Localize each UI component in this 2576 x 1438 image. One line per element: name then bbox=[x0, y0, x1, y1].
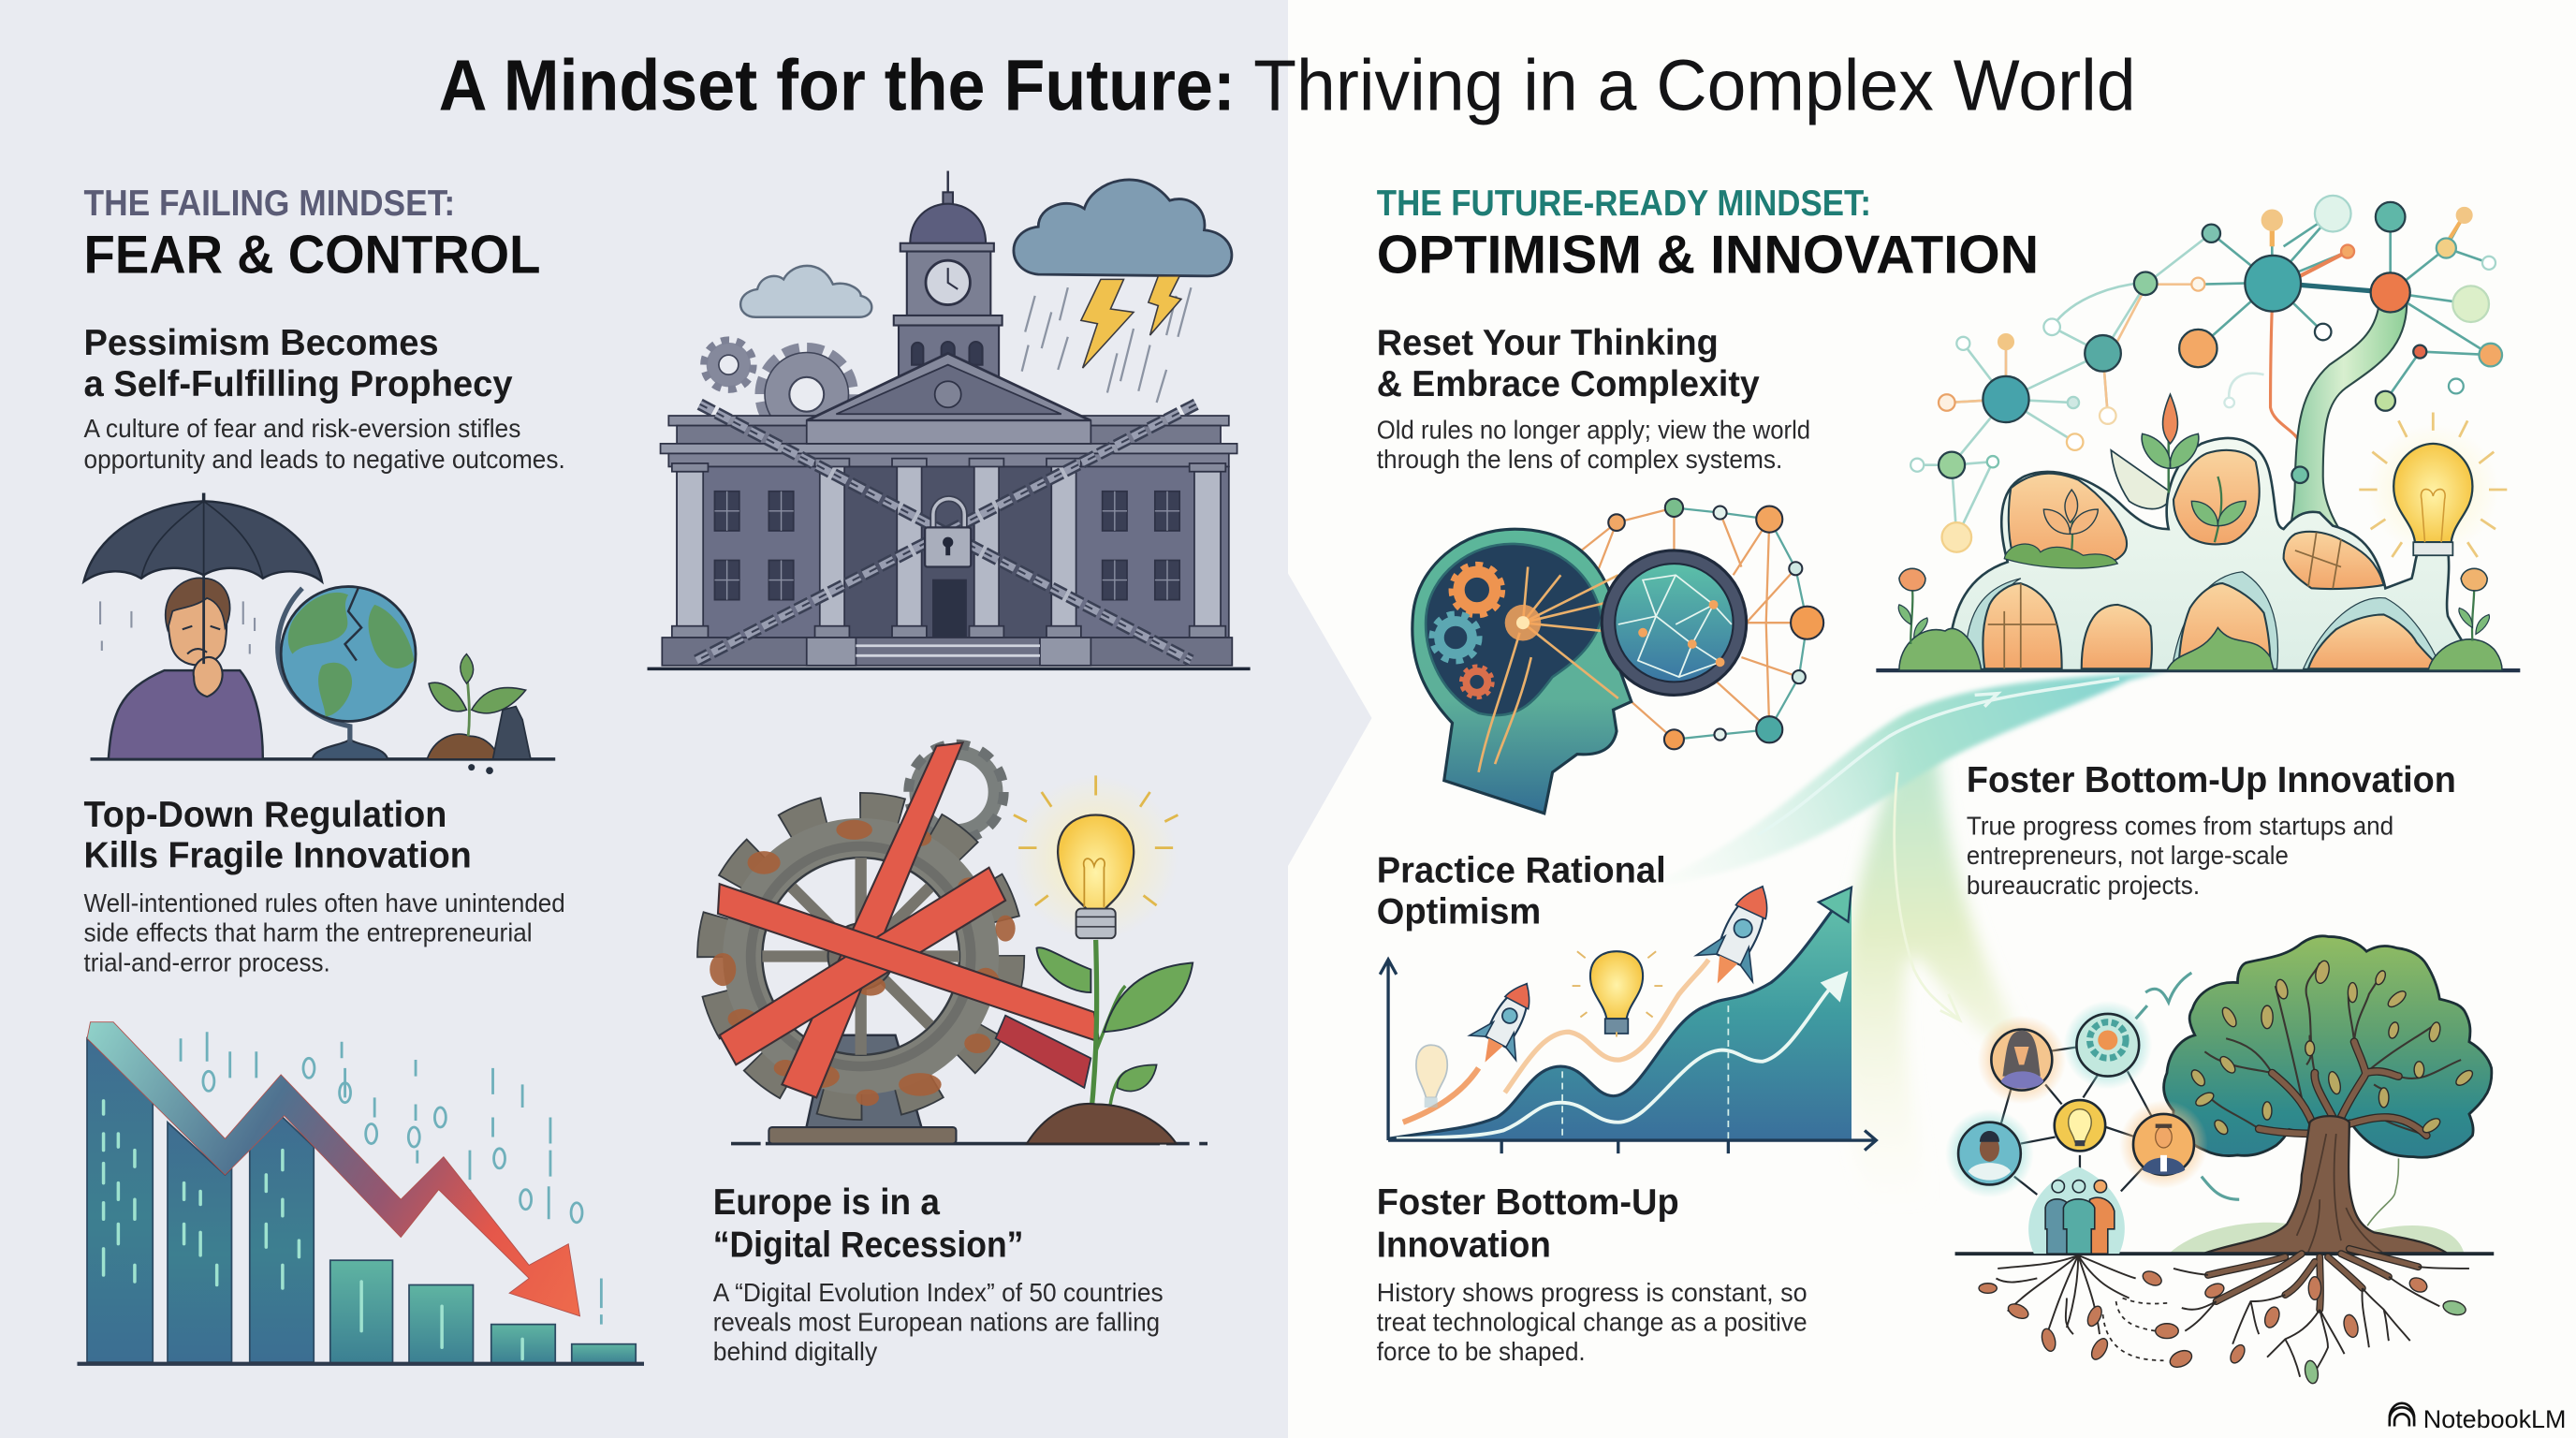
text block: digital recession: A “Digital Evolution Index” of 50 countries bbox=[713, 1278, 1164, 1307]
rocket large bbox=[1689, 873, 1791, 997]
flow arrow: river to rational optimism and to tree bbox=[1643, 670, 2169, 1199]
downward zigzag arrow bbox=[87, 1022, 580, 1316]
globe bbox=[278, 587, 416, 759]
dashed connection paths bbox=[2103, 1299, 2169, 1360]
door bbox=[933, 580, 966, 638]
green growth stem bbox=[2280, 305, 2407, 567]
text block: top-down regulation: side effects that harm the entrepreneurial bbox=[84, 918, 533, 947]
pale orange trail bbox=[1505, 960, 1708, 1093]
top curve bbox=[1388, 901, 1840, 1138]
sprout stem and leaves bbox=[1027, 940, 1193, 1144]
future lightbulb bbox=[2359, 413, 2507, 557]
panel: failing mindset bbox=[77, 171, 1251, 1366]
sprouts and greenery bbox=[1898, 394, 2502, 670]
ground line bbox=[1876, 669, 2520, 671]
gear stand bbox=[805, 1035, 923, 1134]
chart: falling digital bars bbox=[77, 1022, 644, 1364]
text block: pessimism: A culture of fear and risk-eversion stifles bbox=[84, 414, 520, 443]
large rusty gear bbox=[710, 809, 1016, 1106]
ascending orange trail bbox=[1403, 1068, 1479, 1123]
clock tower bbox=[894, 171, 1003, 391]
area bbox=[1388, 888, 1852, 1140]
pediment bbox=[807, 353, 1090, 420]
illustration: tree and people network bbox=[1945, 936, 2494, 1385]
dark red back plank bbox=[996, 1016, 1090, 1088]
base and steps bbox=[662, 638, 1232, 666]
title: A Mindset for the Future: bbox=[439, 46, 1236, 126]
text block: reset your thinking bbox=[1377, 323, 1810, 474]
illustration: blocked rusty gear and lightbulb sprout bbox=[710, 742, 1208, 1144]
binary inside bars bbox=[104, 1101, 522, 1358]
text block: top-down regulation: trial-and-error process. bbox=[84, 947, 330, 976]
title: Thriving in a Complex World bbox=[1253, 46, 2136, 126]
text block: digital recession: Europe is in a bbox=[713, 1182, 940, 1223]
person bbox=[109, 578, 263, 759]
faded lightbulb bbox=[1416, 1045, 1447, 1108]
text block: foster bottom-up innovation (lower): History shows progress is constant, so bbox=[1377, 1278, 1808, 1307]
bars bbox=[87, 1038, 636, 1364]
padlock bbox=[925, 499, 971, 567]
lightning bolts bbox=[1081, 276, 1181, 368]
thin underground roots bbox=[1996, 1255, 2469, 1377]
illustration: organic building with network tree bbox=[1876, 196, 2520, 670]
thin branches bbox=[2204, 963, 2461, 1136]
lightbulb node bbox=[2055, 1100, 2105, 1151]
text block: reset your thinking: Reset Your Thinking bbox=[1377, 323, 1719, 363]
axes bbox=[1380, 960, 1876, 1153]
text block: top-down regulation: Well-intentioned rules often have unintended bbox=[84, 888, 565, 917]
text block: foster bottom-up innovation (lower): force to be shaped. bbox=[1377, 1337, 1586, 1366]
heading: practice rational optimism: Optimism bbox=[1377, 891, 1541, 932]
illustration: head with lens and network bbox=[1412, 499, 1823, 814]
windows bbox=[714, 492, 1179, 600]
section heading: optimism and innovation: OPTIMISM & INNOVATION bbox=[1377, 225, 2039, 285]
text block: pessimism: Pessimism Becomes bbox=[84, 323, 439, 363]
glowing lightbulb bbox=[1014, 775, 1178, 940]
text block: pessimism: opportunity and leads to negative outcomes. bbox=[84, 445, 565, 474]
node on stem bbox=[2291, 466, 2308, 483]
dashed guides bbox=[1562, 1005, 1728, 1138]
text block: top-down regulation: Kills Fragile Innovation bbox=[84, 836, 472, 876]
main building bbox=[661, 353, 1237, 666]
panel: future-ready mindset bbox=[1377, 183, 2520, 1385]
section heading: fear and control: FEAR & CONTROL bbox=[84, 225, 540, 285]
small cloud bbox=[740, 266, 871, 317]
text block: digital recession: behind digitally bbox=[713, 1337, 877, 1366]
text block: foster bottom-up innovation (upper): True progress comes from startups and bbox=[1967, 812, 2393, 841]
network nodes bbox=[1910, 196, 2502, 552]
falling binary digits bbox=[181, 1032, 601, 1325]
green root leaves bbox=[2304, 1299, 2467, 1385]
heading: practice rational optimism bbox=[1377, 851, 1666, 932]
seedling and rock bbox=[427, 654, 531, 774]
storm cloud bbox=[1014, 180, 1232, 276]
trunk and surface roots bbox=[2203, 1116, 2448, 1254]
people network links bbox=[2001, 1047, 2152, 1195]
heading: practice rational optimism: Practice Rational bbox=[1377, 851, 1666, 891]
lightbulb bbox=[1573, 951, 1662, 1036]
trunk grain bbox=[2297, 1134, 2382, 1252]
inner white curve bbox=[1397, 981, 1837, 1138]
text block: top-down regulation: Top-Down Regulation bbox=[84, 795, 446, 835]
brain gears bbox=[1432, 565, 1618, 772]
text block: pessimism bbox=[84, 323, 565, 474]
thick underground roots bbox=[2208, 1249, 2419, 1310]
logo: NotebookLM bbox=[2390, 1403, 2566, 1433]
network nodes bbox=[1608, 499, 1823, 749]
text block: foster bottom-up innovation (upper) bbox=[1967, 760, 2456, 900]
building windows bbox=[1983, 450, 2441, 668]
gears behind building bbox=[704, 340, 853, 440]
text block: reset your thinking: through the lens of complex systems. bbox=[1377, 445, 1782, 474]
text block: digital recession: “Digital Recession” bbox=[713, 1225, 1023, 1266]
rain bbox=[1022, 287, 1191, 403]
icon: notebook arcs bbox=[2390, 1403, 2414, 1426]
columns bbox=[677, 465, 1221, 631]
text block: foster bottom-up innovation (upper): entrepreneurs, not large-scale bbox=[1967, 841, 2289, 870]
text block: reset your thinking: & Embrace Complexity bbox=[1377, 364, 1760, 404]
wordmark: NotebookLM bbox=[2423, 1404, 2566, 1433]
rain streaks bbox=[100, 601, 255, 654]
network links bbox=[1917, 213, 2491, 537]
illustration: person under umbrella with cracked globe bbox=[84, 493, 555, 774]
person node: man right bbox=[2119, 1100, 2208, 1189]
flying birds and drifting leaves bbox=[2136, 973, 2239, 1199]
magnifying lens bbox=[1602, 550, 1747, 695]
rocket small bbox=[1462, 972, 1550, 1075]
people group with halo bbox=[2028, 1167, 2125, 1254]
text block: foster bottom-up innovation (upper): bureaucratic projects. bbox=[1967, 871, 2200, 900]
small rusty gear bbox=[916, 753, 996, 831]
soft hill bbox=[2169, 1223, 2465, 1254]
white arrowhead bbox=[1821, 971, 1848, 1003]
text block: reset your thinking: Old rules no longer apply; view the world bbox=[1377, 416, 1810, 445]
top arrowhead bbox=[1819, 888, 1852, 922]
text block: foster bottom-up innovation (upper): Foster Bottom-Up Innovation bbox=[1967, 760, 2456, 800]
ground dashes bbox=[731, 1143, 1208, 1145]
person node: man left bbox=[1945, 1109, 2034, 1197]
seedling sprig bbox=[2367, 1158, 2398, 1225]
brown branches bbox=[2259, 1042, 2426, 1136]
root leaves bbox=[1979, 1269, 2429, 1371]
ground line bbox=[91, 758, 555, 760]
illustration: chained institution under storm bbox=[648, 171, 1251, 668]
crown bbox=[2164, 936, 2492, 1157]
umbrella bbox=[84, 493, 322, 664]
ground line bbox=[1955, 1253, 2494, 1255]
building shell bbox=[1949, 438, 2481, 670]
text block: foster bottom-up innovation (lower): treat technological change as a positive bbox=[1377, 1308, 1808, 1337]
text block: foster bottom-up innovation (lower): Foster Bottom-Up bbox=[1377, 1182, 1679, 1223]
person node: woman bbox=[1977, 1016, 2066, 1104]
baseline bbox=[77, 1363, 644, 1365]
section kicker: failing mindset: THE FAILING MINDSET: bbox=[84, 183, 455, 224]
section kicker: future-ready mindset: THE FUTURE-READY MINDSET: bbox=[1377, 183, 1871, 224]
text block: top-down regulation bbox=[84, 795, 565, 976]
window frames and interior details bbox=[1988, 533, 2341, 668]
background: left panel with chevron bbox=[0, 0, 1372, 1438]
text block: foster bottom-up innovation (lower): Innovation bbox=[1377, 1225, 1551, 1266]
chains bbox=[696, 404, 1196, 661]
head bbox=[1412, 529, 1632, 814]
cone petal behind building bbox=[2111, 450, 2172, 509]
ground line bbox=[648, 668, 1251, 669]
network behind bbox=[1560, 507, 1808, 740]
chart: rational optimism growth curve bbox=[1380, 873, 1876, 1153]
red planks bbox=[718, 742, 1099, 1097]
brain cavity bbox=[1426, 544, 1602, 715]
text block: pessimism: a Self-Fulfilling Prophecy bbox=[84, 364, 513, 404]
mint shadows of arches bbox=[1965, 572, 2441, 668]
text block: digital recession bbox=[713, 1182, 1164, 1366]
text block: foster bottom-up innovation (lower) bbox=[1377, 1182, 1808, 1366]
leaves bbox=[2188, 960, 2475, 1137]
idea node: teal pattern bbox=[2063, 1001, 2152, 1090]
text block: digital recession: reveals most European nations are falling bbox=[713, 1308, 1160, 1337]
